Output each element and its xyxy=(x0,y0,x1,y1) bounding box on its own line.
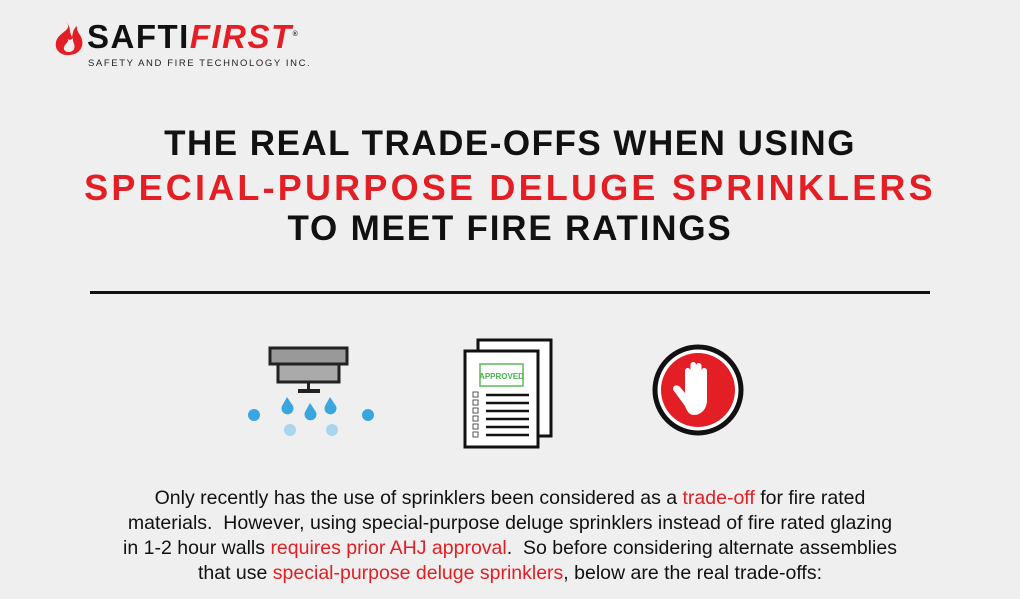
icon: approved documents: APPROVED xyxy=(479,372,524,381)
text block: intro paragraph: Only recently has the use of sprinklers been considered as a trade-off for fire rated xyxy=(155,487,865,509)
logo xyxy=(56,18,311,69)
text block: intro paragraph xyxy=(123,487,897,584)
icon: approved documents xyxy=(464,338,552,448)
text block: intro paragraph: in 1-2 hour walls requires prior AHJ approval. So before considering alternate assemblies xyxy=(123,537,897,559)
icon: sprinkler xyxy=(248,346,374,436)
title: TO MEET FIRE RATINGS xyxy=(288,209,732,248)
title: THE REAL TRADE-OFFS WHEN USING xyxy=(164,124,856,163)
title: SPECIAL-PURPOSE DELUGE SPRINKLERS xyxy=(84,167,936,208)
icon: flame xyxy=(56,22,82,56)
text block: intro paragraph: that use special-purpose deluge sprinklers, below are the real trade-offs: xyxy=(198,562,822,584)
icon: stop hand xyxy=(652,344,744,436)
logo text: SAFTIFIRST® xyxy=(87,18,299,55)
text block: intro paragraph: materials. However, using special-purpose deluge sprinklers instead of fire rated glazing xyxy=(128,512,892,534)
title xyxy=(84,124,936,248)
tagline: SAFETY AND FIRE TECHNOLOGY INC. xyxy=(88,58,311,69)
